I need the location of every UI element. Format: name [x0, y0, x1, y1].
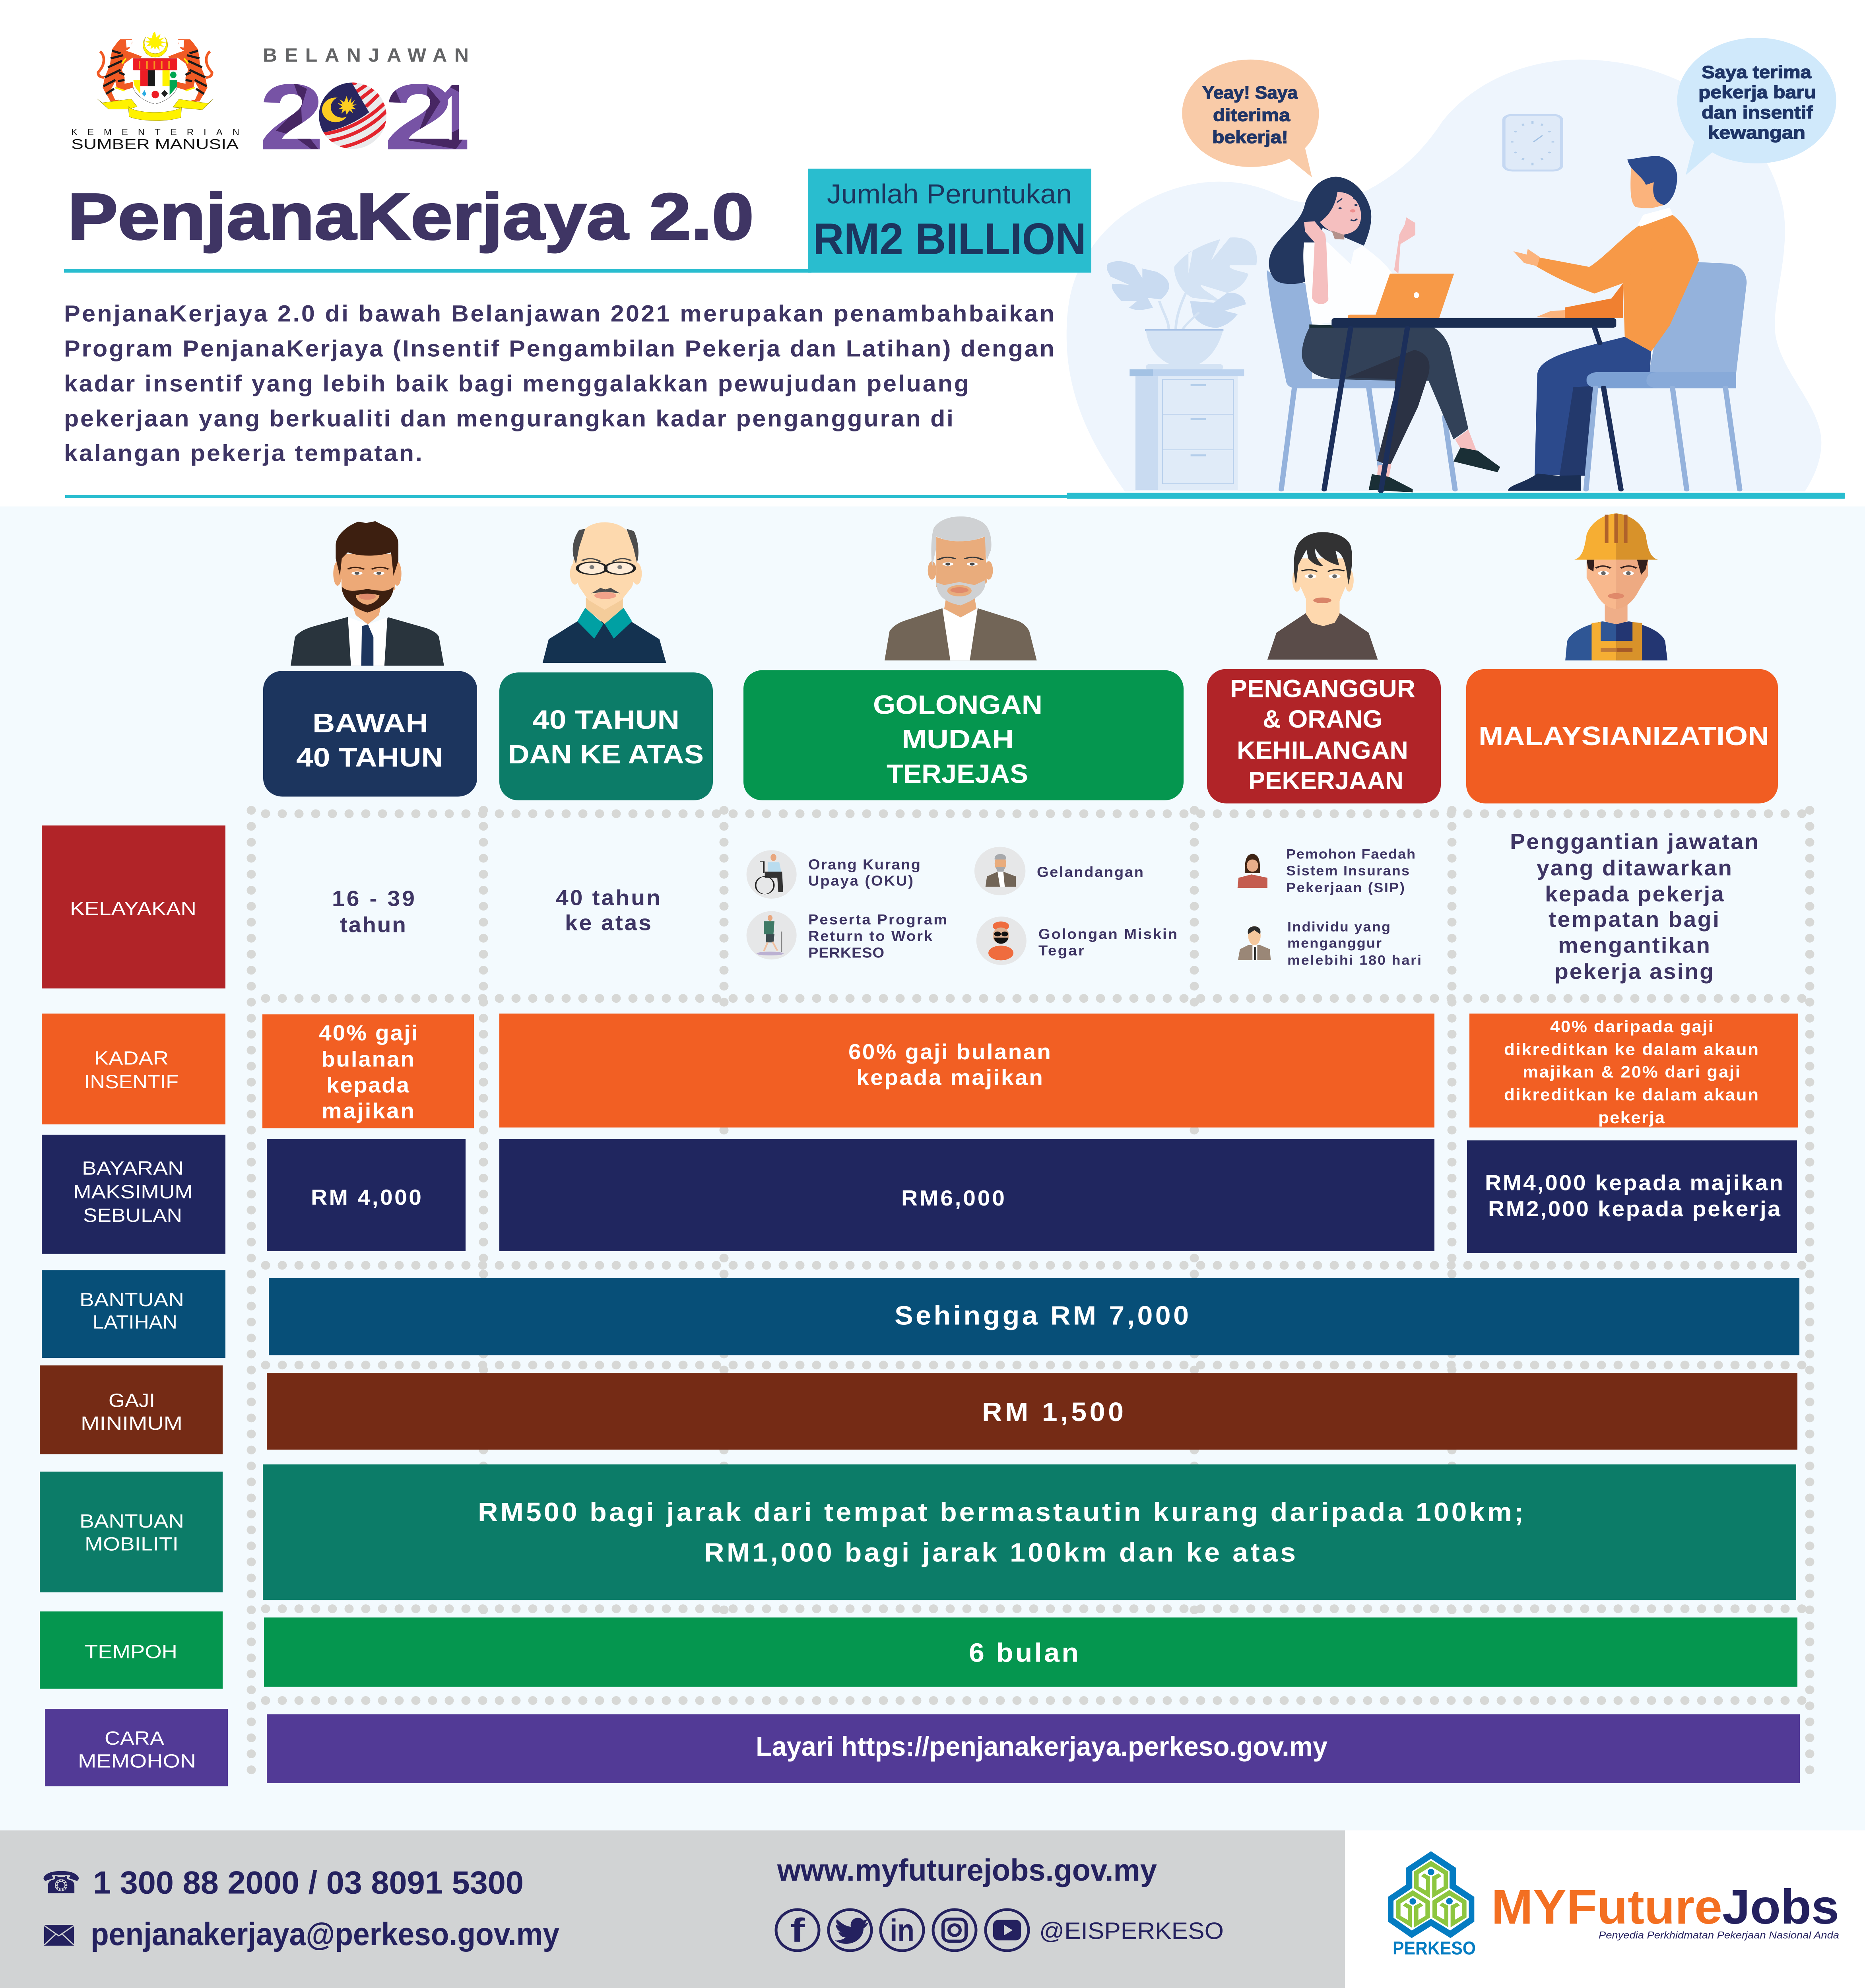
text: Individu menganggur: Individu yang: [1287, 919, 1390, 934]
category card: Penganggur: PEKERJAAN: [1248, 767, 1403, 795]
logo: PERKESO: PERKESO: [1393, 1938, 1476, 1959]
icon: hardcore poor person: [976, 916, 1027, 965]
icon: laptop: [1348, 274, 1454, 318]
row label: Kadar Insentif: KADAR: [94, 1048, 169, 1069]
category card: Malaysianization: MALAYSIANIZATION: [1479, 721, 1769, 751]
text: Individu menganggur: melebihi 180 hari: [1287, 953, 1421, 968]
category card: Malaysianization: [1466, 669, 1778, 804]
training aid bar: Sehingga RM 7,000: [895, 1301, 1189, 1330]
category card: Golongan Mudah Terjejas: GOLONGAN: [873, 690, 1042, 720]
text: Individu menganggur: [1287, 919, 1421, 968]
portrait: over 40 bald man with glasses: [543, 522, 666, 663]
panel: table background: [0, 507, 1865, 1831]
category card: Penganggur: & ORANG: [1263, 705, 1382, 733]
incentive rate: under 40: 40% gaji: [319, 1020, 418, 1045]
eligibility: Malaysianization: yang ditawarkan: [1537, 856, 1732, 880]
eligibility: Malaysianization: pekerja asing: [1554, 959, 1714, 984]
eligibility: Malaysianization: tempatan bagi: [1549, 907, 1719, 932]
category card: Bawah 40 Tahun: [263, 671, 477, 796]
duration bar: 6 bulan: [969, 1638, 1079, 1668]
row label: Gaji Minimum: GAJI: [109, 1390, 155, 1411]
row label: Cara Memohon: [45, 1709, 228, 1786]
portrait: unemployed young man: [1267, 532, 1378, 660]
category card: 40 Tahun dan ke atas: [499, 672, 713, 800]
illustration: office interview scene: [1067, 60, 1821, 492]
incentive rate: under 40: bulanan: [321, 1047, 414, 1071]
logo: Belanjawan 2021: [263, 49, 468, 149]
digit shading: [276, 82, 468, 149]
text: Peserta Program: Return to Work: [808, 928, 932, 944]
speech bubble: peach: Yeay! Saya: [1202, 83, 1298, 103]
text: Golongan Miskin Tegar: Golongan Miskin: [1038, 926, 1177, 942]
eligibility: under 40: tahun: [340, 912, 406, 937]
category card: Golongan Mudah Terjejas: [743, 670, 1184, 800]
incentive rate: Malaysianization: majikan & 20% dari gaji: [1523, 1063, 1740, 1081]
text: Orang Kurang Upaya: [808, 856, 920, 889]
row label: Bantuan Latihan: BANTUAN: [80, 1289, 184, 1310]
category card: Penganggur: [1207, 669, 1441, 804]
logo: Belanjawan 2021: 2: [259, 65, 324, 169]
icon: unemployed man: [1238, 926, 1271, 960]
row label: Gaji Minimum: MINIMUM: [81, 1413, 182, 1434]
text: Pemohon Faedah: Sistem Insurans: [1286, 863, 1409, 879]
max payment: Malaysianization: RM4,000 kepada majikan: [1485, 1171, 1783, 1195]
eligibility: Malaysianization: mengantikan: [1558, 933, 1710, 957]
social icons: f: [790, 1912, 805, 1949]
portrait: construction worker: [1565, 513, 1667, 660]
icon: homeless person: [974, 847, 1025, 895]
crest ministry name: SUMBER MANUSIA: [71, 136, 239, 152]
incentive rate: Malaysianization: dikreditkan ke dalam akaun: [1504, 1085, 1758, 1104]
speech bubble: peach: bekerja!: [1212, 127, 1288, 147]
category card: Bawah 40 Tahun: BAWAH: [312, 708, 428, 738]
icon: telephone: ☎: [41, 1865, 81, 1901]
logo: Kementerian Sumber Manusia crest: [71, 32, 239, 152]
category card: Golongan Mudah Terjejas: TERJEJAS: [887, 759, 1028, 789]
text: Orang Kurang Upaya: Upaya (OKU): [808, 872, 913, 889]
portrait: under 40 man in suit: [291, 521, 444, 666]
row label: Bayaran Maksimum Sebulan: SEBULAN: [83, 1205, 182, 1226]
icon: return to work participant: [747, 911, 797, 959]
category card: 40 Tahun dan ke atas: 40 TAHUN: [532, 705, 679, 735]
speech bubble: blue: pekerja baru: [1698, 82, 1816, 102]
category card: Golongan Mudah Terjejas: MUDAH: [902, 724, 1014, 754]
logo: MYFutureJobs: MYFuture: [1491, 1880, 1722, 1934]
speech bubble: blue: kewangan: [1708, 122, 1805, 142]
eligibility: vulnerable groups: [747, 847, 1177, 965]
text block: introduction: kadar insentif yang lebih baik bagi menggalakkan pewujudan peluang: [64, 371, 969, 396]
row label: Bayaran Maksimum Sebulan: [42, 1135, 225, 1254]
eligibility: 40 and above: 40 tahun: [556, 885, 660, 910]
mobility aid bar: RM1,000 bagi jarak 100km dan ke atas: [704, 1538, 1296, 1567]
woman's chair: [1267, 270, 1455, 490]
mobility aid bar: [263, 1464, 1796, 1600]
logo: MYFutureJobs: [1491, 1880, 1839, 1941]
text block: introduction: Program PenjanaKerjaya (Insentif Pengambilan Pekerja dan Latihan) dengan: [64, 336, 1054, 361]
logo: MYFutureJobs: Penyedia Perkhidmatan Pekerjaan Nasional Anda: [1599, 1930, 1839, 1941]
icon: potted plant: [1107, 237, 1257, 370]
text block: introduction: kalangan pekerja tempatan.: [64, 440, 422, 466]
text: Peserta Program: Peserta Program: [808, 911, 947, 928]
callout: total allocation: [808, 169, 1091, 273]
max payment: Malaysianization: [1467, 1140, 1797, 1253]
illustration backdrop blob: [1067, 60, 1821, 491]
max payment: RM6,000: RM6,000: [901, 1186, 1005, 1210]
row label: Bayaran Maksimum Sebulan: MAKSIMUM: [73, 1182, 193, 1203]
row label: Tempoh: TEMPOH: [85, 1642, 177, 1662]
logo: MYFutureJobs: Jobs: [1722, 1880, 1839, 1934]
max payment: RM6,000: [499, 1139, 1434, 1251]
max payment: under 40: RM 4,000: [311, 1185, 421, 1209]
email: penjanakerjaya@perkeso.gov.my: [91, 1916, 559, 1952]
icon: wall clock: [1504, 115, 1562, 171]
speech bubble: blue: Saya terima: [1702, 62, 1812, 82]
incentive rate: under 40: majikan: [322, 1099, 414, 1123]
row label: Kelayakan: KELAYAKAN: [70, 898, 196, 919]
eligibility: Malaysianization: Penggantian jawatan: [1510, 829, 1758, 854]
crest ministry name: KEMENTERIAN: [71, 127, 239, 137]
row label: Kelayakan: [42, 825, 225, 988]
row label: Gaji Minimum: [40, 1365, 223, 1454]
incentive rate: Malaysianization: dikreditkan ke dalam akaun: [1504, 1041, 1758, 1059]
callout: total allocation: Jumlah Peruntukan: [827, 179, 1072, 209]
right tiger: [168, 39, 212, 101]
incentive rate: Malaysianization: pekerja: [1598, 1109, 1665, 1127]
desk: [1324, 318, 1621, 491]
icon: SIP claimant woman: [1238, 854, 1267, 888]
text: Golongan Miskin Tegar: [1038, 926, 1177, 959]
icon: envelope: [44, 1925, 74, 1946]
speech bubble: blue: [1677, 38, 1836, 175]
how to apply bar: [267, 1714, 1800, 1783]
callout: total allocation: RM2 BILLION: [813, 214, 1086, 264]
speech bubble: blue: dan insentif: [1702, 103, 1813, 122]
text: Peserta Program: [808, 911, 947, 961]
text: Orang Kurang Upaya: Orang Kurang: [808, 856, 920, 872]
training aid bar: [269, 1278, 1799, 1355]
crest ministry name: [71, 127, 239, 152]
speech bubble: peach: diterima: [1213, 105, 1291, 125]
social icons: [776, 1910, 1029, 1951]
man's chair seat: [1586, 372, 1740, 490]
text block: introduction: PenjanaKerjaya 2.0 di bawah Belanjawan 2021 merupakan penambahbaikan: [64, 300, 1054, 326]
flag globe: [318, 81, 388, 149]
title underline: [64, 269, 811, 273]
category card: Penganggur: PENGANGGUR: [1230, 675, 1415, 703]
row label: Bayaran Maksimum Sebulan: BAYARAN: [82, 1158, 184, 1179]
man's chair: [1649, 262, 1747, 374]
row label: Tempoh: [40, 1611, 223, 1689]
max payment: Malaysianization: RM2,000 kepada pekerja: [1488, 1196, 1781, 1221]
duration bar: [264, 1617, 1797, 1687]
text: Peserta Program: PERKESO: [808, 944, 884, 961]
logo: PERKESO: [1388, 1851, 1476, 1959]
incentive rate: 60 percent: 60% gaji bulanan: [848, 1039, 1051, 1064]
eligibility: Malaysianization: kepada pekerja: [1545, 881, 1724, 906]
icon: wheelchair user: [747, 850, 797, 899]
footer: contact panel: [0, 1831, 1345, 1988]
logo: Belanjawan 2021: 2: [384, 65, 454, 169]
speech bubble: peach: [1182, 60, 1319, 177]
portrait: vulnerable group older man: [885, 516, 1037, 660]
figure: woman: [1269, 177, 1500, 492]
how to apply bar: Layari https://penjanakerjaya.perkeso.gov.my: [756, 1731, 1327, 1761]
icon: filing cabinet: [1129, 369, 1244, 490]
row label: Cara Memohon: MEMOHON: [78, 1751, 196, 1772]
dotted table grid: [251, 810, 1810, 1782]
social icons: in: [890, 1913, 914, 1947]
row label: Cara Memohon: CARA: [105, 1728, 164, 1749]
logo: Belanjawan 2021: 1: [439, 65, 469, 169]
category card: Bawah 40 Tahun: 40 TAHUN: [296, 742, 443, 772]
social handle: @EISPERKESO: [1039, 1918, 1224, 1944]
text: Pemohon Faedah: Pemohon Faedah: [1286, 846, 1415, 862]
eligibility: Malaysianization: [1510, 829, 1758, 984]
text: Pemohon Faedah: Pekerjaan (SIP): [1286, 880, 1405, 895]
section rule: [65, 493, 1845, 499]
website: www.myfuturejobs.gov.my: [777, 1853, 1157, 1887]
row label: Kadar Insentif: INSENTIF: [84, 1072, 179, 1093]
eligibility: under 40: 16 - 39: [332, 886, 415, 911]
max payment: under 40: [267, 1139, 466, 1251]
text block: introduction: pekerjaan yang berkualiti dan mengurangkan kadar pengangguran di: [64, 406, 953, 431]
row label: Bantuan Mobiliti: [40, 1472, 223, 1592]
row label: Bantuan Mobiliti: MOBILITI: [85, 1534, 179, 1555]
text block: introduction: [64, 300, 1054, 466]
incentive rate: 60 percent: [499, 1013, 1434, 1128]
incentive rate: Malaysianization: 40% daripada gaji: [1550, 1017, 1713, 1036]
incentive rate: Malaysianization: [1469, 1013, 1798, 1128]
incentive rate: under 40: kepada: [326, 1073, 409, 1097]
phone numbers: 1 300 88 2000 / 03 8091 5300: [93, 1865, 524, 1901]
crest emblem: [97, 32, 213, 120]
category card: 40 Tahun dan ke atas: DAN KE ATAS: [508, 739, 704, 769]
row label: Bantuan Latihan: [42, 1270, 225, 1358]
incentive rate: under 40: [262, 1014, 474, 1128]
text: Individu menganggur: menganggur: [1287, 936, 1382, 951]
minimum wage bar: [267, 1373, 1797, 1450]
text: Pemohon Faedah: [1286, 846, 1415, 895]
left tiger: [98, 39, 142, 101]
text: Gelandangan: Gelandangan: [1037, 864, 1143, 880]
text: Golongan Miskin Tegar: Tegar: [1038, 942, 1084, 959]
row label: Bantuan Mobiliti: BANTUAN: [80, 1511, 184, 1532]
row label: Bantuan Latihan: LATIHAN: [93, 1312, 177, 1333]
row label: Kadar Insentif: [42, 1013, 225, 1124]
category card: Penganggur: KEHILANGAN: [1237, 736, 1408, 764]
mobility aid bar: RM500 bagi jarak dari tempat bermastautin kurang daripada 100km;: [478, 1497, 1523, 1527]
eligibility: 40 and above: [556, 885, 660, 935]
eligibility: unemployed: [1238, 846, 1421, 968]
title: PenjanaKerjaya 2.0: [68, 180, 754, 253]
eligibility: 40 and above: ke atas: [565, 911, 651, 935]
minimum wage bar: RM 1,500: [982, 1397, 1124, 1427]
eligibility: under 40: [332, 886, 415, 937]
logo: Belanjawan 2021: BELANJAWAN: [263, 45, 469, 66]
figure: man: [1508, 156, 1699, 491]
incentive rate: 60 percent: kepada majikan: [856, 1065, 1043, 1089]
